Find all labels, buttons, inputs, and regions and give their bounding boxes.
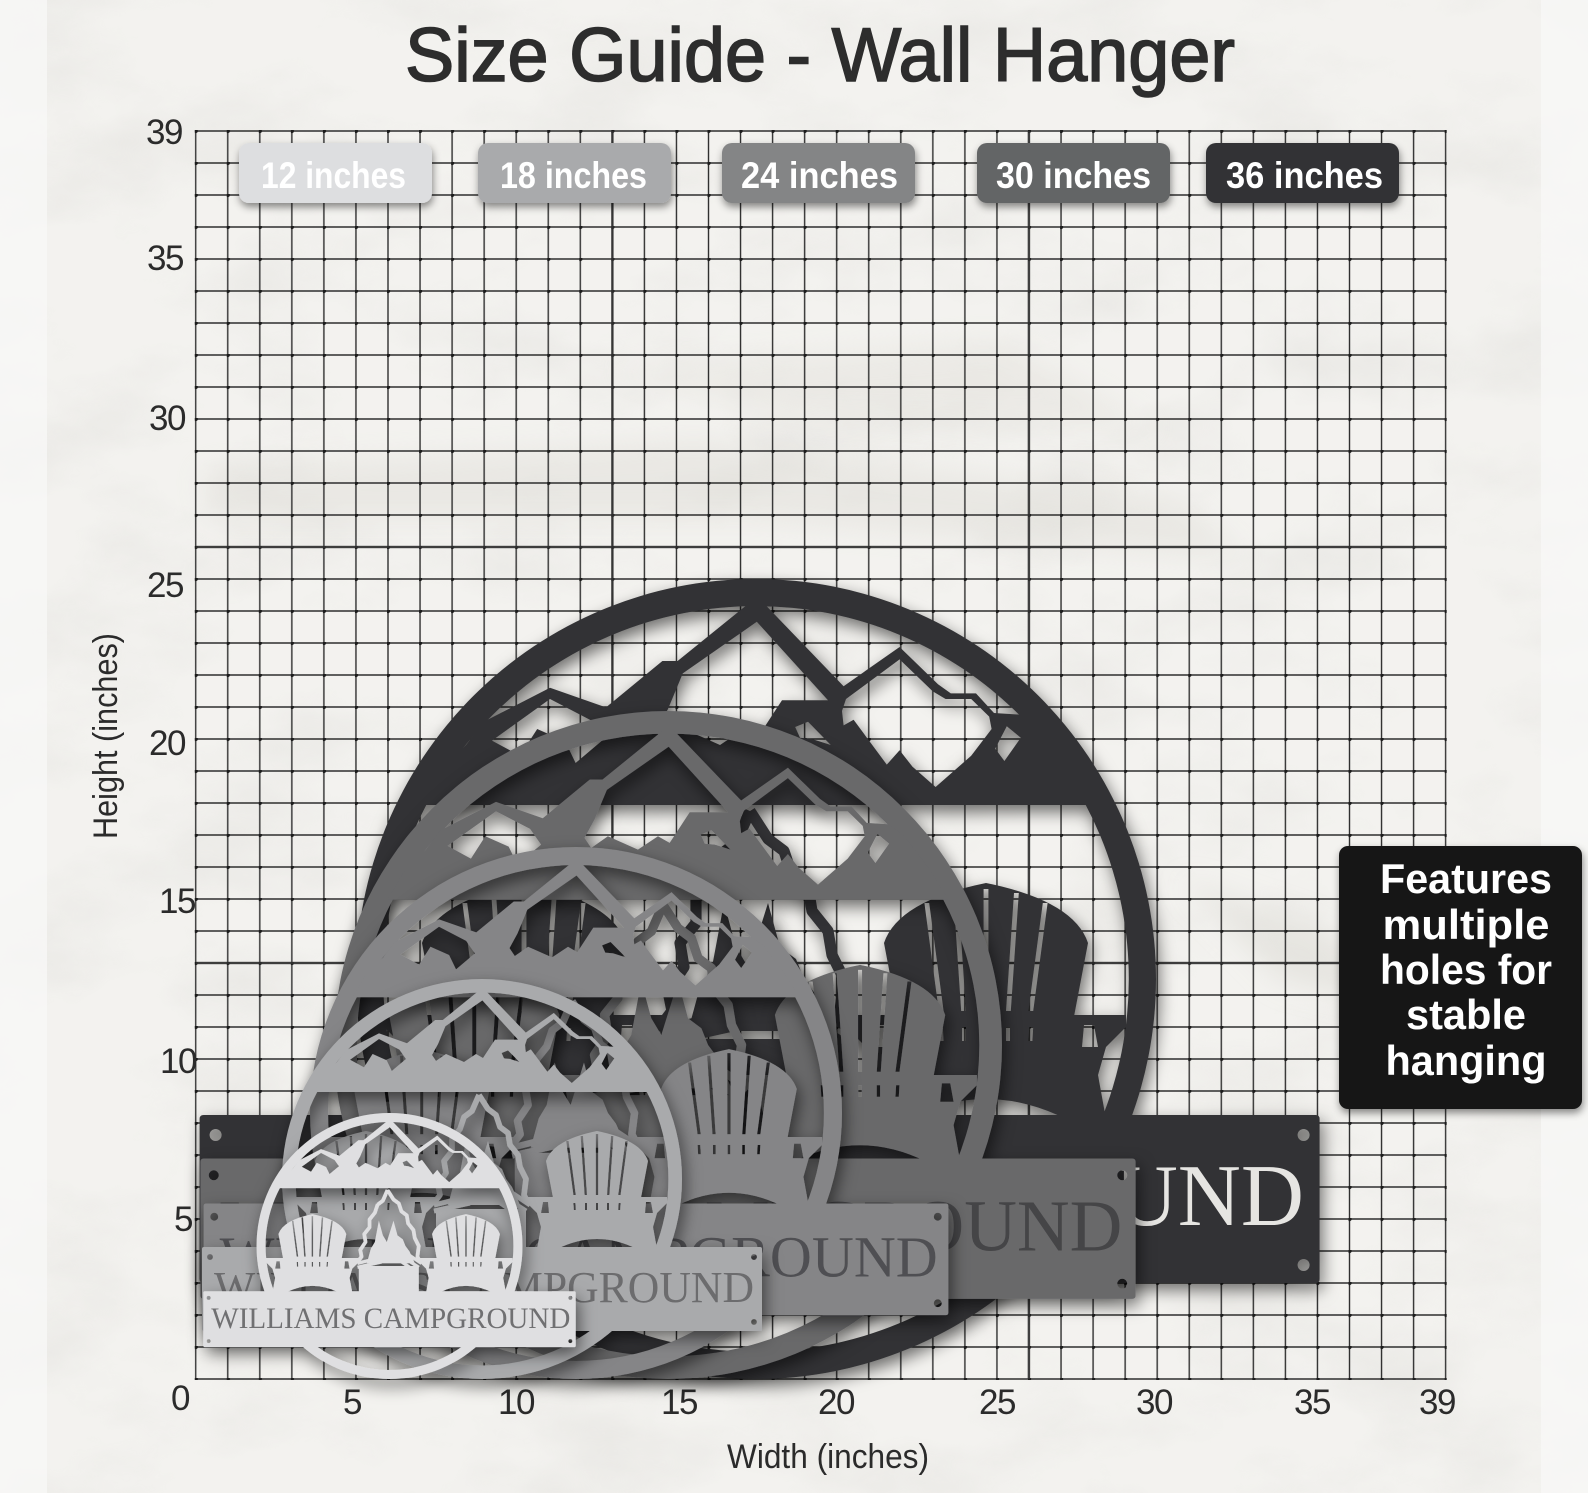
sign: 12 inches: [203, 1113, 576, 1379]
legend: 12 inches: [239, 143, 432, 203]
callout: features: holes for: [1380, 946, 1552, 993]
y axis tick labels: 0: [171, 1379, 190, 1418]
y axis tick labels: 35: [147, 239, 183, 278]
callout: features: stable: [1406, 991, 1526, 1038]
legend: 12 inches: 12 inches: [261, 155, 406, 196]
x axis tick labels: 35: [1294, 1383, 1330, 1422]
y axis tick labels: 39: [146, 113, 182, 152]
x axis tick labels: 5: [343, 1383, 361, 1422]
legend: 18 inches: 18 inches: [500, 155, 647, 196]
sign: 36 inches: [200, 579, 1320, 1379]
sign: 30 inches: [200, 711, 1136, 1379]
y axis tick labels: 30: [149, 399, 186, 438]
y axis tick labels: 15: [159, 882, 195, 921]
sign: 18 inches: [202, 979, 762, 1379]
y axis tick labels: [146, 113, 197, 1418]
sign: 36 inches: WILLIAMS CAMPGROUND: [224, 1148, 1304, 1245]
x axis title: Width (inches): [727, 1438, 929, 1476]
sign: 12 inches: WILLIAMS CAMPGROUND: [211, 1303, 570, 1335]
sign: 18 inches: WILLIAMS CAMPGROUND: [214, 1263, 754, 1312]
legend: 24 inches: [722, 143, 915, 203]
x axis tick labels: 39: [1419, 1383, 1455, 1422]
callout: features: multiple: [1382, 901, 1550, 948]
callout: features: hanging: [1386, 1037, 1546, 1084]
sign: 24 inches: [204, 847, 948, 1379]
x axis tick labels: 20: [818, 1383, 855, 1422]
y axis tick labels: 5: [174, 1200, 192, 1239]
y axis tick labels: 20: [149, 724, 186, 763]
legend: 36 inches: 36 inches: [1226, 155, 1383, 196]
callout: features: Features: [1380, 855, 1552, 902]
y axis tick labels: 10: [160, 1042, 197, 1081]
sign: 24 inches: WILLIAMS CAMPGROUND: [220, 1225, 938, 1290]
callout: features: [1339, 846, 1582, 1109]
y axis tick labels: 25: [147, 566, 183, 605]
legend: 36 inches: [1206, 143, 1399, 203]
x axis tick labels: 30: [1136, 1383, 1173, 1422]
x axis tick labels: [343, 1383, 1455, 1422]
y axis title: Height (inches): [87, 633, 125, 839]
x axis tick labels: 10: [498, 1383, 535, 1422]
x axis tick labels: 25: [979, 1383, 1015, 1422]
chart grid: [195, 130, 1447, 1380]
title: Size Guide - Wall Hanger: [405, 13, 1235, 98]
legend: 30 inches: 30 inches: [996, 155, 1151, 196]
sign: 30 inches: WILLIAMS CAMPGROUND: [220, 1185, 1122, 1266]
legend: 30 inches: [977, 143, 1170, 203]
legend: 24 inches: 24 inches: [741, 155, 898, 196]
x axis tick labels: 15: [661, 1383, 697, 1422]
legend: 18 inches: [478, 143, 671, 203]
